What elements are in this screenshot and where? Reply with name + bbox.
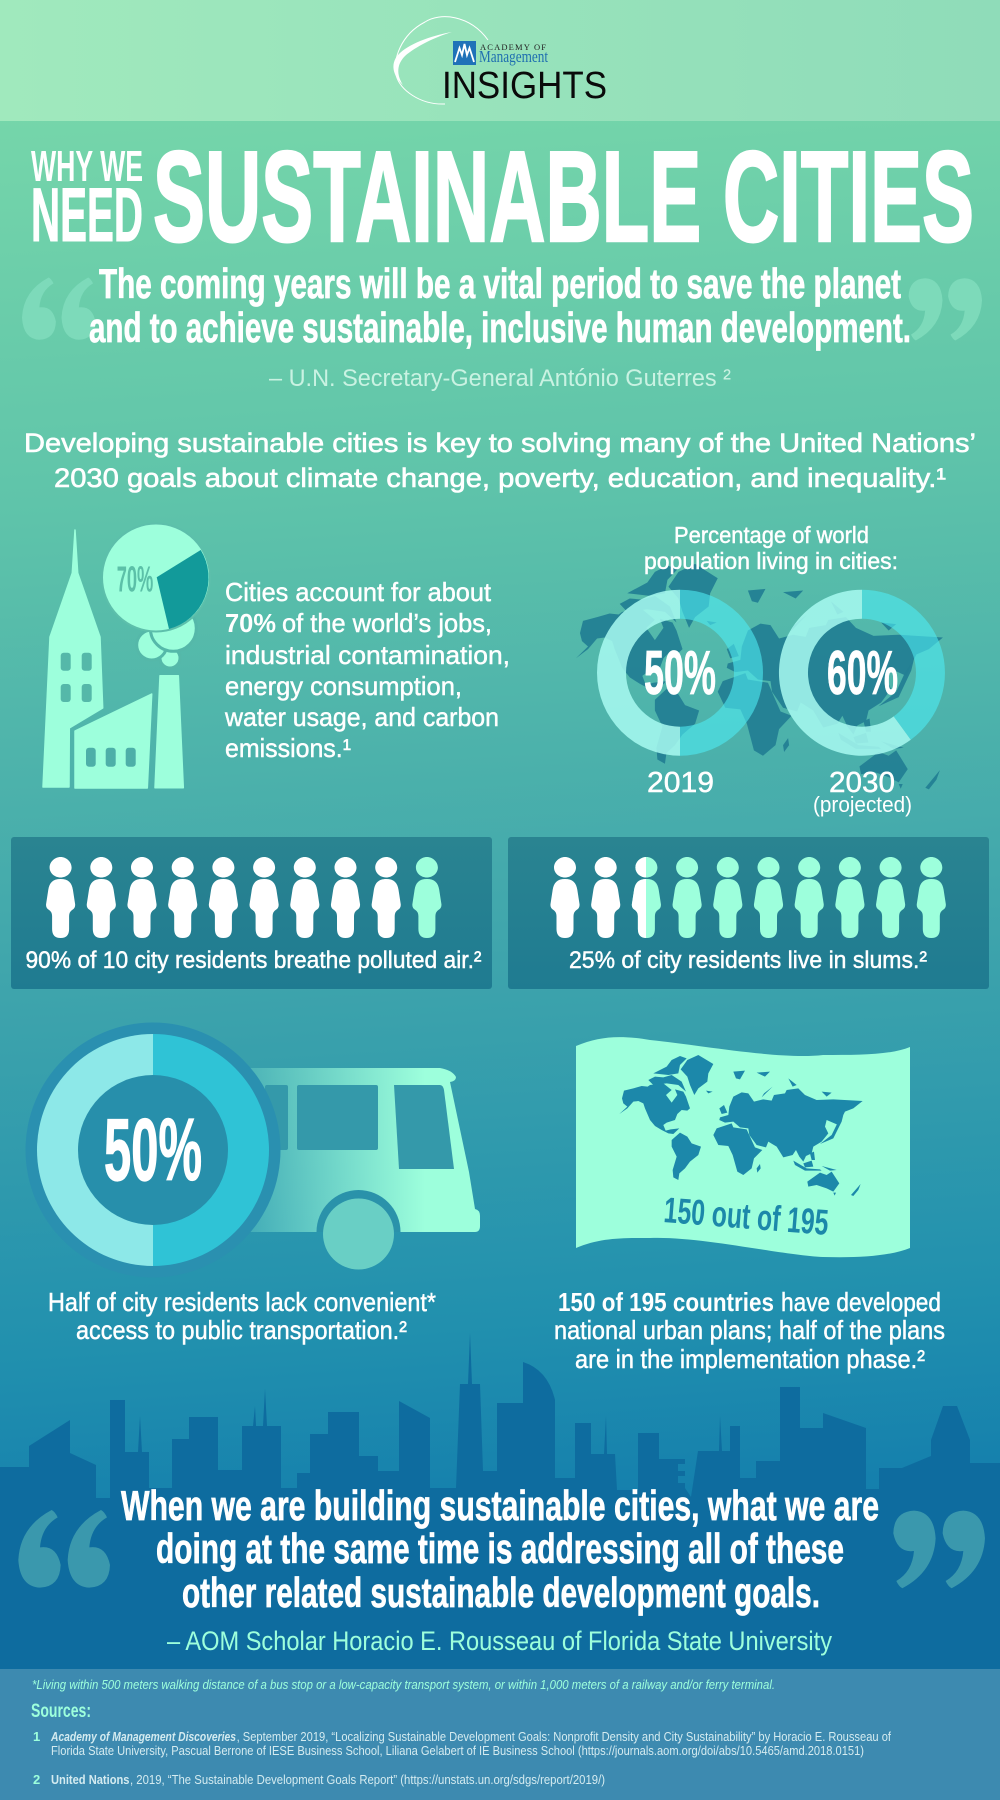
text: 150 of 195 countries: 150 of 195 countries xyxy=(558,1287,774,1317)
world map behind donuts xyxy=(576,564,943,789)
source 2: 2 xyxy=(33,1772,40,1787)
text: cities account for 70% xyxy=(224,577,510,763)
text: cities account for 70%: of the world’s jobs, xyxy=(282,608,492,638)
logo swoosh xyxy=(393,17,488,104)
panel: 25% live in slums xyxy=(508,837,989,989)
people pictogram: 9 of 10 xyxy=(46,857,441,938)
source 1: Academy of Management Discoveries xyxy=(50,1730,236,1744)
text: 150 of 195 countries: are in the implementation phase.² xyxy=(575,1344,925,1374)
text: cities account for 70%: industrial contamination, xyxy=(225,640,510,670)
top quote marks xyxy=(22,278,982,340)
donut chart: 50% in 2019: 50% xyxy=(644,639,716,708)
pie chart 70% xyxy=(102,524,210,632)
top quote text xyxy=(89,260,911,351)
donut chart: 50% lack transport: 50% xyxy=(104,1100,202,1199)
source 1: Florida State University, Pascual Berrone of IESE Business School, Liliana Gelabert of IE Business School (https://journals.aom.org/doi/abs/10.5465/amd.2018.0151) xyxy=(51,1744,864,1758)
text: 150 of 195 countries: national urban plans; half of the plans xyxy=(554,1315,945,1345)
icon: city with smoke pie chart xyxy=(43,524,210,788)
source 1 xyxy=(33,1729,891,1758)
people pictogram: 2.5 of 10 xyxy=(550,857,946,938)
icon: flag with world map xyxy=(576,1037,910,1257)
donut chart: 50% in 2019 xyxy=(597,590,763,799)
text: cities account for 70%: energy consumption, xyxy=(225,671,462,701)
quote attribution: – U.N. Secretary-General António Guterres ² xyxy=(269,365,731,392)
donut chart: 60% in 2030 xyxy=(779,590,945,817)
title: NEED xyxy=(31,173,143,258)
source 1: , September 2019, “Localizing Sustainable Development Goals: Nonprofit Density and City Sustainability” by Horacio E. Rousseau of xyxy=(237,1730,891,1744)
intro statement: Developing sustainable cities is key to solving many of the United Nations’ xyxy=(24,428,976,458)
icon: factory xyxy=(75,676,183,788)
text: half of residents lack transport: access to public transportation.² xyxy=(76,1315,407,1345)
text: cities account for 70%: 70% xyxy=(225,608,276,638)
donut chart: 50% lack transport xyxy=(26,1022,280,1278)
logo wordmark: Management xyxy=(479,47,548,66)
footer: footnote and sources xyxy=(0,1669,1000,1800)
bottom quote text xyxy=(121,1482,879,1616)
text: cities account for 70%: emissions.¹ xyxy=(225,733,351,763)
source 2: United Nations xyxy=(51,1773,130,1787)
sources heading: Sources: xyxy=(31,1701,91,1722)
text: half of residents lack transport xyxy=(48,1287,436,1345)
text: 150 of 195 countries xyxy=(554,1287,945,1374)
logo wordmark: ACADEMY OF xyxy=(480,42,546,52)
title: WHY WE xyxy=(31,142,143,191)
chart heading: percentage of world population: population living in cities: xyxy=(644,548,898,574)
text: half of residents lack transport: Half of city residents lack convenient* xyxy=(48,1287,436,1317)
donut chart: 60% in 2030: 2030 xyxy=(829,767,895,799)
header band with logo xyxy=(0,0,1000,121)
text: cities account for 70%: Cities account for about xyxy=(225,577,492,607)
chart heading: percentage of world population xyxy=(644,522,898,574)
source 2: , 2019, “The Sustainable Development Goals Report” (https://unstats.un.org/sdgs/report/2019/) xyxy=(130,1773,605,1787)
donut chart: 50% in 2019: 2019 xyxy=(647,767,714,799)
donut chart: 60% in 2030: 60% xyxy=(827,639,898,708)
logo wordmark xyxy=(442,42,607,107)
panel: 90% breathe polluted air xyxy=(11,837,492,989)
intro statement: 2030 goals about climate change, poverty, education, and inequality.¹ xyxy=(54,463,946,493)
chart heading: percentage of world population: Percentage of world xyxy=(674,522,869,548)
city skyline xyxy=(0,1333,1000,1669)
panel caption: 25% of city residents live in slums.² xyxy=(569,947,927,974)
icon: church tower xyxy=(43,530,103,787)
logo wordmark: INSIGHTS xyxy=(442,65,607,107)
pie chart 70%: 70% xyxy=(117,559,153,600)
logo mark xyxy=(453,41,476,65)
icon: flag with world map: 150 out of 195 xyxy=(662,1189,830,1243)
bottom quote marks xyxy=(18,1510,985,1588)
text: 150 of 195 countries: have developed xyxy=(781,1287,941,1317)
panel caption: 90% of 10 city residents breathe polluted air.² xyxy=(26,947,482,974)
text: cities account for 70%: water usage, and carbon xyxy=(224,702,499,732)
icon: bus xyxy=(240,1068,480,1270)
bottom quote attribution: – AOM Scholar Horacio E. Rousseau of Florida State University xyxy=(167,1626,832,1656)
icon: smoke xyxy=(137,605,196,668)
source 1: 1 xyxy=(33,1729,40,1744)
donut chart: 60% in 2030: (projected) xyxy=(813,792,912,817)
footnote: *Living within 500 meters walking distance of a bus stop or a low-capacity transport system, or within 1,000 meters of a railway and/or ferry terminal. xyxy=(32,1677,775,1692)
intro statement xyxy=(24,428,976,493)
